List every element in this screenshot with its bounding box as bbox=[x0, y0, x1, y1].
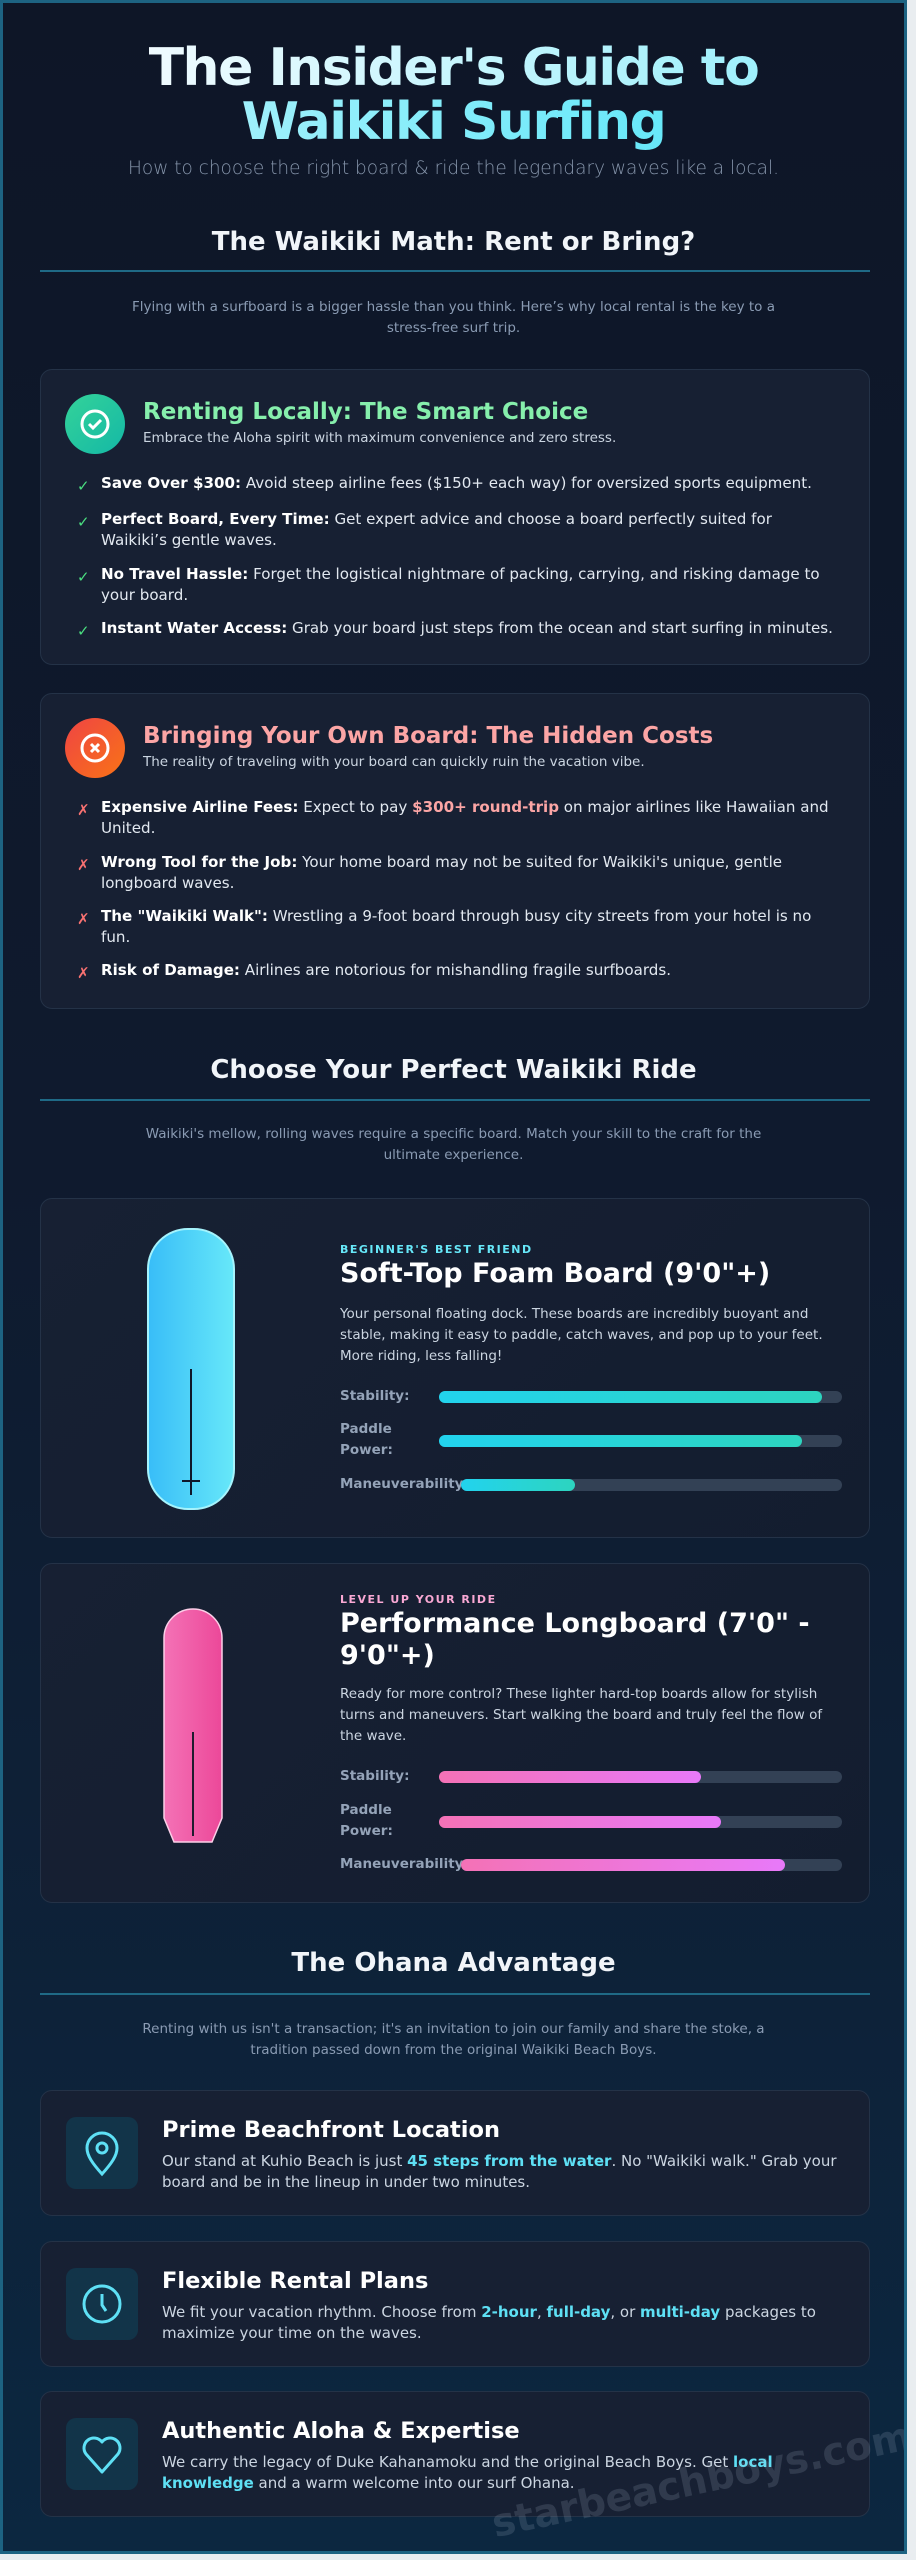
list: hidden costs: Risk of Damage: Airlines are notorious for mishandling fragile surfboards. bbox=[101, 961, 671, 979]
subheading: Embrace the Aloha spirit with maximum convenience and zero stress. bbox=[143, 430, 616, 446]
list: hidden costs bbox=[77, 798, 829, 982]
bar chart: longboard stats: Paddle bbox=[340, 1802, 392, 1818]
list: hidden costs: ✗ bbox=[77, 964, 90, 982]
text: Our stand at Kuhio Beach is just 45 steps from the water. No "Waikiki walk." Grab your board and be in the lineup in under two minutes. bbox=[162, 2152, 836, 2191]
bar chart: soft-top stats: Stability: bbox=[340, 1388, 409, 1404]
heading: Renting Locally: The Smart Choice bbox=[143, 399, 588, 425]
intro text: Flying with a surfboard is a bigger hassle than you think. Here’s why local rental is the key to a stress-free surf trip. bbox=[132, 299, 775, 336]
panel: authentic aloha bbox=[40, 2391, 870, 2517]
icon: heart bbox=[66, 2418, 138, 2490]
list: renting benefits: No Travel Hassle: Forget the logistical nightmare of packing, carrying, and risking damage to your board. bbox=[101, 565, 820, 604]
icon: x circle bbox=[65, 718, 125, 778]
heading: Prime Beachfront Location bbox=[162, 2117, 500, 2143]
board info: soft-top bbox=[340, 1243, 842, 1492]
list: renting benefits: Save Over $300: Avoid steep airline fees ($150+ each way) for oversized sports equipment. bbox=[101, 474, 812, 492]
bar chart: longboard stats: Stability: bbox=[340, 1768, 409, 1784]
list: hidden costs: Wrong Tool for the Job: Your home board may not be suited for Waikiki's unique, gentle longboard waves. bbox=[101, 853, 782, 892]
bar chart: soft-top stats bbox=[340, 1388, 842, 1492]
title bbox=[149, 38, 758, 152]
list: renting benefits: Perfect Board, Every Time: Get expert advice and choose a board perfectly suited for bbox=[101, 510, 772, 528]
list: hidden costs: ✗ bbox=[77, 910, 90, 928]
bar chart: soft-top stats: Power: bbox=[340, 1442, 393, 1458]
list: renting benefits: ✓ bbox=[77, 477, 90, 495]
heading: Bringing Your Own Board: The Hidden Costs bbox=[143, 723, 713, 749]
list: renting benefits: ✓ bbox=[77, 513, 90, 531]
title: Waikiki Surfing bbox=[242, 92, 665, 152]
bar chart: soft-top stats: Maneuverability: bbox=[340, 1476, 469, 1492]
board info: soft-top: BEGINNER'S BEST FRIEND bbox=[340, 1243, 533, 1256]
text: We carry the legacy of Duke Kahanamoku and the original Beach Boys. Get local knowledge and a warm welcome into our surf Ohana. bbox=[162, 2453, 773, 2492]
board info: soft-top: Your personal floating dock. These boards are incredibly buoyant and stable, making it easy to paddle, catch waves, and pop up to your feet. More riding, less falling! bbox=[340, 1306, 823, 1364]
icon: check circle bbox=[65, 394, 125, 454]
bar chart: longboard stats: Maneuverability: bbox=[340, 1856, 469, 1872]
subheading: The reality of traveling with your board can quickly ruin the vacation vibe. bbox=[143, 754, 645, 770]
panel: flexible plans bbox=[40, 2241, 870, 2367]
panel: bringing own board bbox=[40, 693, 870, 1009]
intro text: Renting with us isn't a transaction; it's an invitation to join our family and share the stoke, a tradition passed down from the original Waikiki Beach Boys. bbox=[142, 2021, 765, 2058]
list: hidden costs: The "Waikiki Walk": Wrestling a 9-foot board through busy city streets from your hotel is no bbox=[101, 907, 811, 925]
list: hidden costs: Expensive Airline Fees: Expect to pay $300+ round-trip on major airlines like Hawaiian and United. bbox=[101, 798, 829, 837]
text: We fit your vacation rhythm. Choose from 2-hour, full-day, or multi-day packages to maximize your time on the waves. bbox=[162, 2303, 816, 2342]
icon: pink surfboard bbox=[163, 1608, 223, 1843]
heading: choose ride: Choose Your Perfect Waikiki Ride bbox=[210, 1055, 697, 1085]
list: renting benefits: ✓ bbox=[77, 622, 90, 640]
title: The Insider's Guide to bbox=[149, 38, 758, 98]
icon: clock bbox=[66, 2268, 138, 2340]
icon: blue surfboard bbox=[147, 1228, 235, 1510]
list: renting benefits bbox=[77, 474, 833, 640]
board info: longboard: Ready for more control? These lighter hard-top boards allow for stylish turns and maneuvers. Start walking the board and truly feel the flow of the wave. bbox=[340, 1686, 822, 1744]
list: hidden costs: fun. bbox=[101, 928, 130, 946]
board info: soft-top: Soft-Top Foam Board (9'0"+) bbox=[340, 1258, 770, 1289]
panel: renting locally bbox=[40, 369, 870, 665]
list: renting benefits: Instant Water Access: Grab your board just steps from the ocean and start surfing in minutes. bbox=[101, 619, 833, 637]
board info: longboard: Performance Longboard (7'0" - 9'0"+) bbox=[340, 1608, 810, 1671]
watermark: starbeachboys.com bbox=[488, 2414, 907, 2547]
heading: rent or bring: The Waikiki Math: Rent or Bring? bbox=[212, 227, 695, 257]
list: hidden costs: ✗ bbox=[77, 801, 90, 819]
subtitle: How to choose the right board & ride the legendary waves like a local. bbox=[128, 158, 779, 179]
panel: soft-top board bbox=[40, 1198, 870, 1538]
list: renting benefits: Waikiki’s gentle waves. bbox=[101, 531, 277, 549]
list: renting benefits: ✓ bbox=[77, 568, 90, 586]
intro text: Waikiki's mellow, rolling waves require a specific board. Match your skill to the craft for the ultimate experience. bbox=[146, 1126, 761, 1163]
board info: longboard bbox=[340, 1593, 842, 1872]
heading: ohana advantage: The Ohana Advantage bbox=[291, 1948, 616, 1978]
heading: Authentic Aloha & Expertise bbox=[162, 2418, 520, 2444]
heading: Flexible Rental Plans bbox=[162, 2268, 428, 2294]
board info: longboard: LEVEL UP YOUR RIDE bbox=[340, 1593, 497, 1606]
panel: prime location bbox=[40, 2090, 870, 2216]
bar chart: longboard stats bbox=[340, 1768, 842, 1872]
bar chart: soft-top stats: Paddle bbox=[340, 1421, 392, 1437]
panel: performance longboard bbox=[40, 1563, 870, 1903]
list: hidden costs: ✗ bbox=[77, 856, 90, 874]
bar chart: longboard stats: Power: bbox=[340, 1823, 393, 1839]
icon: map pin bbox=[66, 2117, 138, 2189]
